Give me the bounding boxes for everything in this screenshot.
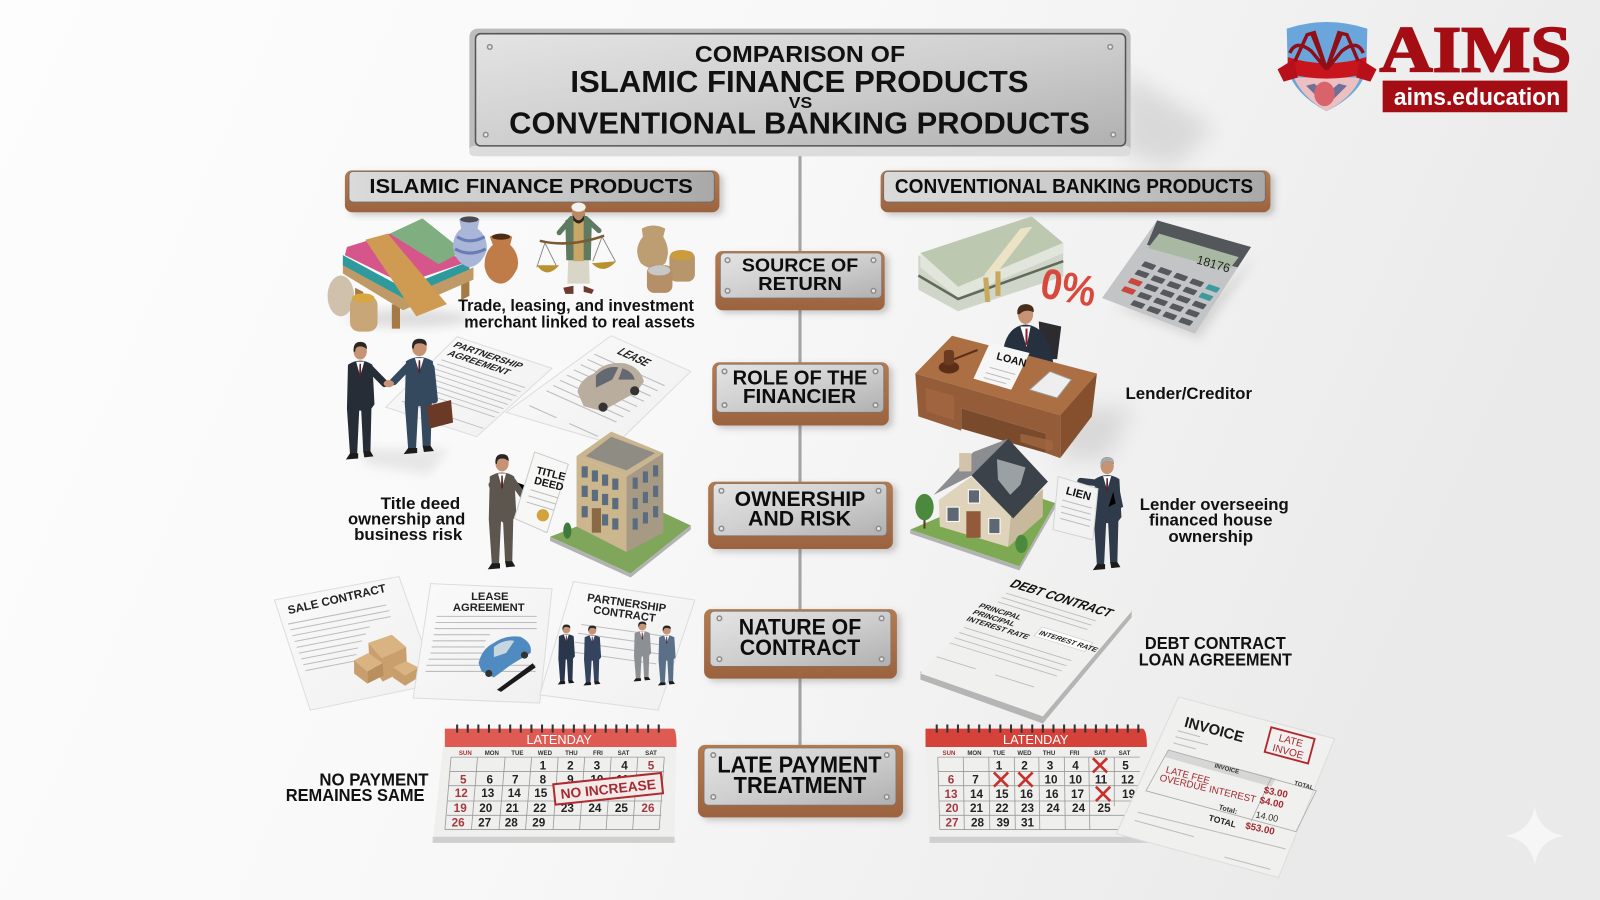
document: partnership contract: PARTNERSHIP xyxy=(586,592,667,615)
invoice table: TOTAL xyxy=(1208,813,1238,830)
calendar: Islamic no increase: 27 xyxy=(478,817,491,830)
icon: house xyxy=(910,439,1055,570)
calendar: Islamic no increase: 3 xyxy=(594,759,601,772)
invoice table: $53.00 xyxy=(1244,821,1276,838)
calendar: Islamic no increase: 8 xyxy=(540,774,547,787)
figure: left businessman xyxy=(346,342,385,459)
row label: ownership and risk xyxy=(708,482,893,549)
stamp: no increase xyxy=(553,773,663,805)
invoice: INVOICE xyxy=(1183,715,1246,746)
icon: cardboard boxes xyxy=(354,635,418,686)
illustration: debt contract stack: DEBT CONTRACT xyxy=(1006,577,1117,620)
caption: ownership, conventional: Lender overseeing xyxy=(1140,495,1289,514)
row label: role of the financier: ROLE OF THE xyxy=(733,368,867,390)
calendar: conventional late fee xyxy=(926,724,1151,843)
calendar: conventional late fee: 20 xyxy=(946,802,959,815)
calendar: Islamic no increase: 1 xyxy=(540,759,547,772)
calendar: conventional late fee: 27 xyxy=(946,817,959,830)
calendar: Islamic no increase xyxy=(433,724,678,843)
calendar: conventional late fee: 7 xyxy=(972,774,979,787)
calendar: conventional late fee: 10 xyxy=(1069,774,1083,787)
document: partnership agreement: AGREEMENT xyxy=(444,349,513,377)
calendar: Islamic no increase: 24 xyxy=(588,802,602,815)
document: lease agreement xyxy=(413,584,552,703)
figure: banker behind desk xyxy=(1002,304,1061,362)
invoice table: 14.00 xyxy=(1255,810,1279,824)
icon: red crosses on missed dates xyxy=(994,758,1110,801)
calendar: conventional late fee: SAT xyxy=(1119,750,1131,757)
calendar: Islamic no increase: 26 xyxy=(452,817,465,830)
caption: nature of contract, conventional: DEBT CONTRACT xyxy=(1145,633,1286,653)
calendar: Islamic no increase: 6 xyxy=(487,774,494,787)
column heading: Conventional banking products: CONVENTIONAL BANKING PRODUCTS xyxy=(895,176,1253,198)
column heading: Conventional banking products xyxy=(881,170,1270,212)
calendar: Islamic no increase: 29 xyxy=(532,817,546,830)
calendar: Islamic no increase: 23 xyxy=(561,802,574,815)
calendar: Islamic no increase: TUE xyxy=(511,750,523,757)
calendar: Islamic no increase: 11 xyxy=(616,774,629,787)
center connector line xyxy=(798,153,802,750)
row label: late payment treatment xyxy=(698,745,903,817)
caption: late payment, Islamic: NO PAYMENT xyxy=(319,770,429,790)
illustration: money, zero percent and calculator xyxy=(918,216,1257,339)
row label: late payment treatment: TREATMENT xyxy=(734,772,866,798)
illustration: man holding title deed with building xyxy=(488,432,691,578)
calendar: conventional late fee: 21 xyxy=(970,802,984,815)
invoice table: $3.00 xyxy=(1263,785,1289,801)
row label: nature of contract xyxy=(704,609,897,679)
calendar: conventional late fee: 31 xyxy=(1021,817,1035,830)
calendar: Islamic no increase: WED xyxy=(538,750,553,757)
calendar: conventional late fee: 28 xyxy=(971,817,985,830)
calendar: Islamic no increase: 5 xyxy=(648,759,655,772)
row label: source of return xyxy=(715,251,885,310)
calendar: Islamic no increase: SUN xyxy=(459,750,472,757)
document: sale contract xyxy=(274,577,437,710)
illustration: partnership agreement and lease documents xyxy=(386,336,691,445)
calendar: conventional late fee: MON xyxy=(967,750,982,757)
caption: ownership, conventional xyxy=(1140,495,1289,546)
row label: late payment treatment: LATE PAYMENT xyxy=(717,751,882,777)
caption: source of return, Islamic: Trade, leasing, and investment xyxy=(458,297,694,315)
calendar: conventional late fee: 15 xyxy=(996,788,1009,801)
document: lease agreement: LEASE xyxy=(471,591,509,603)
row label: nature of contract: CONTRACT xyxy=(740,635,861,660)
icon: briefcase xyxy=(427,400,453,429)
caption: role of financier, conventional: Lender/Creditor xyxy=(1126,385,1253,403)
calendar: Islamic no increase: 2 xyxy=(567,759,574,772)
icon: blue vase xyxy=(453,216,487,267)
icon: apartment building xyxy=(550,432,691,578)
figure: lender xyxy=(1081,457,1121,570)
illustration: three Islamic contracts xyxy=(274,577,695,710)
calendar: Islamic no increase: SAT xyxy=(618,750,630,757)
calendar: Islamic no increase: 22 xyxy=(533,802,547,815)
logo url box: aims.education xyxy=(1394,84,1560,111)
caption: nature of contract, conventional: LOAN AGREEMENT xyxy=(1139,649,1292,669)
figures: four partners shaking hands xyxy=(558,621,676,686)
logo wordmark: AIMS xyxy=(1380,14,1571,86)
calendar: conventional late fee: LATENDAY xyxy=(1003,732,1069,747)
icon: terracotta vase xyxy=(485,234,518,284)
row label: source of return: SOURCE OF xyxy=(742,254,858,275)
calendar: Islamic no increase: 10 xyxy=(590,774,604,787)
document: lien xyxy=(1053,477,1098,540)
document: lease with car xyxy=(506,336,691,445)
figure: right businessman xyxy=(394,339,435,454)
calendar: conventional late fee: 3 xyxy=(1047,759,1054,772)
document: partnership contract xyxy=(540,582,695,710)
icon: clay jars xyxy=(637,226,695,293)
caption: source of return, Islamic: merchant linked to real assets xyxy=(464,314,695,332)
row label: nature of contract: NATURE OF xyxy=(739,615,861,640)
icon: calculator xyxy=(1102,220,1257,339)
calendar: Islamic no increase: 14 xyxy=(508,787,521,800)
title vs: VS xyxy=(789,95,812,112)
calendar: conventional late fee: 17 xyxy=(1071,788,1084,801)
calendar: Islamic no increase: 12 xyxy=(455,787,468,800)
caption: ownership, Islamic: ownership and xyxy=(348,510,465,528)
icon: watermark sparkle xyxy=(1505,806,1564,865)
invoice table: OVERDUE INTEREST xyxy=(1159,773,1257,806)
row label: ownership and risk: OWNERSHIP xyxy=(735,488,865,511)
icon: handshake xyxy=(384,380,394,387)
calendar: conventional late fee: 6 xyxy=(948,774,955,787)
document: title deed: TITLE xyxy=(535,465,567,484)
title plate xyxy=(469,29,1214,168)
row label: source of return: RETURN xyxy=(758,273,842,294)
calendar: Islamic no increase: 28 xyxy=(505,817,518,830)
icon: textile table xyxy=(328,218,473,332)
calendar: conventional late fee: 4 xyxy=(1072,759,1079,772)
title line 2: ISLAMIC FINANCE PRODUCTS xyxy=(570,66,1029,99)
invoice table: $4.00 xyxy=(1259,795,1285,811)
calendar: conventional late fee: WED xyxy=(1017,750,1032,757)
calendar: Islamic no increase: 5 xyxy=(460,774,467,787)
icon: fountain pen xyxy=(497,663,536,692)
calendar: conventional late fee: 24 xyxy=(1072,802,1086,815)
icon: merchant with scales xyxy=(537,203,616,294)
document: title deed: DEED xyxy=(533,475,565,494)
invoice table: TOTAL xyxy=(1293,780,1315,792)
document: partnership contract: CONTRACT xyxy=(592,604,657,625)
column heading: Islamic finance products xyxy=(345,170,719,212)
document: loan: LOAN xyxy=(995,350,1028,370)
calendar: Islamic no increase: 20 xyxy=(479,802,493,815)
icon: banknote stacks xyxy=(918,216,1063,311)
calendar: Islamic no increase: SAT xyxy=(645,750,657,757)
calendar: conventional late fee: 24 xyxy=(1047,802,1060,815)
invoice table: LATE FEE xyxy=(1165,765,1211,787)
calendar: conventional late fee: SUN xyxy=(943,750,955,757)
caption: ownership, Islamic: business risk xyxy=(354,526,463,544)
caption: source of return, Islamic xyxy=(458,297,695,332)
caption: ownership, conventional: ownership xyxy=(1168,527,1253,546)
stamp: late invoice xyxy=(1265,727,1315,764)
caption: late payment, Islamic: REMAINES SAME xyxy=(286,785,424,805)
calendar: Islamic no increase: 4 xyxy=(621,759,628,772)
column heading: Islamic finance products: ISLAMIC FINANCE PRODUCTS xyxy=(369,176,693,198)
calendar: conventional late fee: SAT xyxy=(1094,750,1106,757)
calendar: Islamic no increase: 9 xyxy=(567,774,574,787)
calendar: conventional late fee: 11 xyxy=(1095,774,1108,787)
calendar: conventional late fee: 25 xyxy=(1098,802,1111,815)
calendar: conventional late fee: 39 xyxy=(997,817,1010,830)
icon: blue car xyxy=(479,636,531,678)
illustration: trade goods and merchant xyxy=(328,203,695,332)
icon: zero percent: 0% xyxy=(1037,260,1100,316)
document: lease with car: LEASE xyxy=(613,346,654,368)
stamp: no increase: NO INCREASE xyxy=(560,777,657,802)
document: title deed xyxy=(514,452,568,533)
document: sale contract: SALE CONTRACT xyxy=(287,582,388,617)
calendar: conventional late fee: 14 xyxy=(970,788,984,801)
icon: gavel xyxy=(939,350,978,373)
icon: calculator: 18176 xyxy=(1195,253,1232,276)
document: loan xyxy=(973,343,1030,390)
icon: stacked papers xyxy=(1030,371,1071,398)
caption: late payment, Islamic xyxy=(286,770,429,805)
document: partnership agreement xyxy=(386,337,552,437)
calendar: Islamic no increase: 19 xyxy=(454,802,467,815)
calendar: Islamic no increase: FRI xyxy=(593,750,603,757)
calendar: conventional late fee: 13 xyxy=(944,788,958,801)
caption: ownership, Islamic xyxy=(348,495,465,544)
calendar: Islamic no increase: 25 xyxy=(615,802,628,815)
title line 1: COMPARISON OF xyxy=(695,41,905,67)
illustration: lender at desk with loan document xyxy=(915,304,1133,459)
row label: ownership and risk: AND RISK xyxy=(748,508,851,531)
calendar: conventional late fee: FRI xyxy=(1070,750,1080,757)
figure: man with deed xyxy=(488,454,529,569)
illustration: debt contract stack: INTEREST RATE xyxy=(964,615,1032,641)
calendar: conventional late fee: THU xyxy=(1043,750,1056,757)
calendar: conventional late fee: 12 xyxy=(1121,774,1135,787)
icon: wooden desk xyxy=(915,336,1097,458)
document: lien: LIEN xyxy=(1065,485,1092,503)
invoice table: Total: xyxy=(1218,803,1238,816)
calendar: Islamic no increase: MON xyxy=(485,750,499,757)
illustration: debt contract stack: INTEREST RATE xyxy=(1037,629,1100,653)
invoice xyxy=(1116,697,1335,878)
document: partnership agreement: PARTNERSHIP xyxy=(450,341,526,371)
icon: shield crest xyxy=(1278,22,1377,111)
calendar: conventional late fee: 5 xyxy=(1122,759,1129,772)
calendar: Islamic no increase: 26 xyxy=(641,802,655,815)
calendar: Islamic no increase: LATENDAY xyxy=(526,732,592,747)
icon: silver car xyxy=(578,363,644,412)
caption: ownership, conventional: financed house xyxy=(1149,511,1272,530)
stamp: late invoice: LATE xyxy=(1277,733,1304,750)
illustration: debt contract stack: PRINCIPAL xyxy=(977,602,1024,621)
row label: role of the financier: FINANCIER xyxy=(743,386,856,408)
calendar: Islamic no increase: 13 xyxy=(481,787,495,800)
calendar: conventional late fee: 1 xyxy=(996,759,1003,772)
caption: nature of contract, conventional xyxy=(1139,633,1292,669)
calendar: conventional late fee: 22 xyxy=(996,802,1009,815)
calendar: conventional late fee: TUE xyxy=(993,750,1005,757)
row label: role of the financier xyxy=(712,362,889,426)
calendar: Islamic no increase: 7 xyxy=(512,774,519,787)
invoice table xyxy=(1146,750,1316,838)
illustration: debt contract stack xyxy=(920,574,1132,723)
calendar: conventional late fee: 10 xyxy=(1044,774,1058,787)
invoice table: INVOICE xyxy=(1214,763,1240,776)
logo: AIMS education xyxy=(1278,14,1571,112)
illustration: house and lender with lien xyxy=(910,439,1121,570)
calendar: Islamic no increase: THU xyxy=(565,750,578,757)
title line 3: CONVENTIONAL BANKING PRODUCTS xyxy=(509,108,1090,141)
stamp: late invoice: INVOE xyxy=(1271,743,1305,762)
calendar: conventional late fee: 16 xyxy=(1020,788,1034,801)
calendar: Islamic no increase: 21 xyxy=(506,802,519,815)
caption: ownership, Islamic: Title deed xyxy=(381,495,460,513)
illustration: two businessmen shaking hands xyxy=(346,339,453,474)
illustration: debt contract stack: PRINCIPAL xyxy=(970,609,1018,628)
calendar: conventional late fee: 23 xyxy=(1021,802,1035,815)
calendar: Islamic no increase: 15 xyxy=(534,787,548,800)
document: lease agreement: AGREEMENT xyxy=(453,602,525,614)
calendar: conventional late fee: 16 xyxy=(1046,788,1059,801)
calendar: conventional late fee: 2 xyxy=(1021,759,1028,772)
calendar: conventional late fee: 19 xyxy=(1122,788,1136,801)
